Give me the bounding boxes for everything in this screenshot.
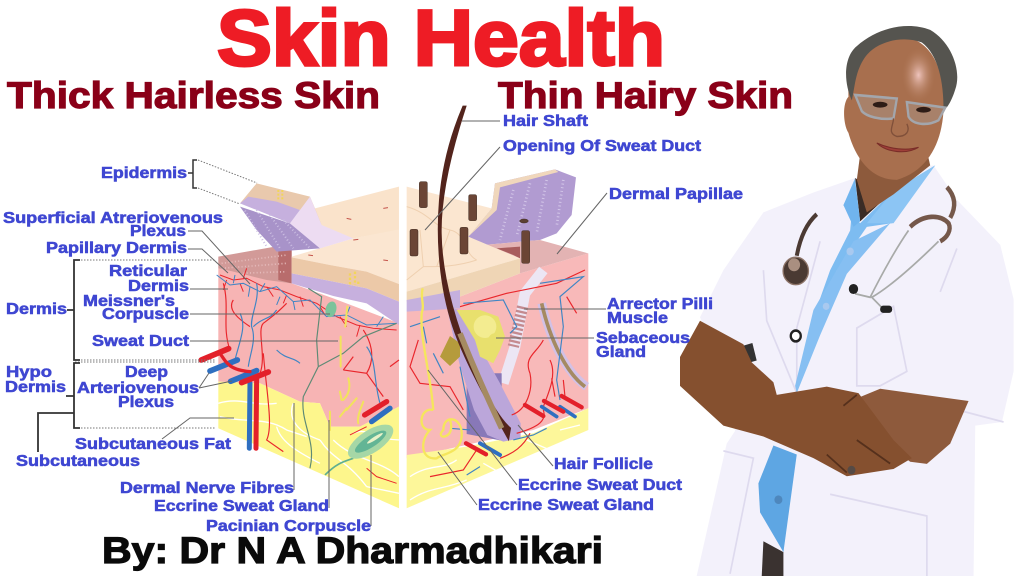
side hair follicle [542,303,587,387]
glasses [855,95,945,124]
sweat ducts and gland [330,307,363,430]
label: reticular: Reticular [109,263,187,280]
label: subcutaneous fat: Subcutaneous Fat [75,436,231,453]
epidermis front bands [407,258,520,312]
heading: thick hairless skin: Thick Hairless Skin [7,75,380,116]
left side leaders [162,231,371,526]
arrector pili muscle [503,270,543,383]
stethoscope [783,187,954,341]
label: muscle: Muscle [607,310,668,327]
deep vessels [223,283,399,452]
label: deep: Deep [125,364,168,381]
label: eccrine sweat duct: Eccrine Sweat Duct [518,477,682,494]
label: epidermis: Epidermis [101,165,187,182]
label: gland: Gland [596,344,646,361]
doctor portrait [680,26,1014,576]
label: meissner's: Meissner's [83,293,175,310]
fat layer [407,408,588,508]
eyes and mouth [873,102,931,152]
floating epidermis flap [240,183,353,252]
subcutaneous fat layer [218,382,399,508]
head and neck [844,36,944,212]
epidermis bracket [188,160,197,188]
label: pacinian corpuscle: Pacinian Corpuscle [206,518,371,535]
hair stubs [410,182,530,263]
follicle sheath [447,307,521,442]
small artery and vein pair [365,402,390,422]
dotted guides [75,160,257,428]
skin diagram: thin hairy block [407,107,588,508]
pacinian corpuscle [325,418,399,475]
vessels [410,270,585,477]
label: corpuscle: Corpuscle [102,306,189,323]
byline: By: Dr N A Dharmadhikari [102,530,603,571]
label: arteriovenous: Arteriovenous [77,380,199,397]
papillary block [218,246,292,283]
skin diagram: thick hairless block [201,183,399,508]
label: hypo dermis: Dermis [5,379,66,396]
label: eccrine sweat gland right: Eccrine Sweat Gland [478,497,654,514]
label: plexus: Plexus [130,223,186,240]
superficial plexus vessels [217,268,397,337]
upper flap [468,169,588,273]
label: sweat duct: Sweat Duct [92,333,189,350]
right side leaders [425,121,607,505]
label: arrector pilli: Arrector Pilli [607,296,713,313]
hair [846,26,957,109]
eccrine sweat duct and gland [421,288,462,458]
small vessels in fat [350,427,397,483]
dermis pink layer [218,268,399,427]
label: dermis bracket: Dermis [6,301,67,318]
epidermis surface [407,187,520,292]
meissner corpuscle [324,300,338,318]
blue shirt [758,165,935,576]
main hair shaft [439,107,510,438]
lab coat [697,165,1014,576]
coat shading [723,241,1004,576]
label: hair follicle: Hair Follicle [554,456,653,473]
label: deep plexus: Plexus [118,394,174,411]
label: subcutaneous: Subcutaneous [16,453,140,470]
epidermis top surface [292,187,399,325]
label: sebaceous: Sebaceous [596,330,690,347]
dermis pink layer [407,253,588,458]
label: eccrine sweat gland left: Eccrine Sweat Gland [154,498,329,515]
label: superficial arteriovenous: Superficial Atreriovenous [3,210,223,227]
label: dermis: Dermis [128,278,189,295]
dermis and hypodermis brackets [38,260,80,452]
label: papillary dermis: Papillary Dermis [46,240,187,257]
dermal nerve fibres [303,288,397,468]
large artery and vein [201,349,268,448]
label: dermal nerve fibres: Dermal Nerve Fibres [120,480,294,497]
label: hypo: Hypo [6,364,52,381]
label: hair shaft: Hair Shaft [503,113,588,130]
artery vein pairs [466,396,582,455]
label: dermal papillae: Dermal Papillae [609,186,743,203]
heading: thin hairy skin: Thin Hairy Skin [498,75,793,116]
crossed forearms [680,321,969,476]
label: opening of sweat duct: Opening Of Sweat Duct [503,138,701,155]
sebaceous glands [440,310,505,366]
leader lines and brackets [38,121,607,526]
